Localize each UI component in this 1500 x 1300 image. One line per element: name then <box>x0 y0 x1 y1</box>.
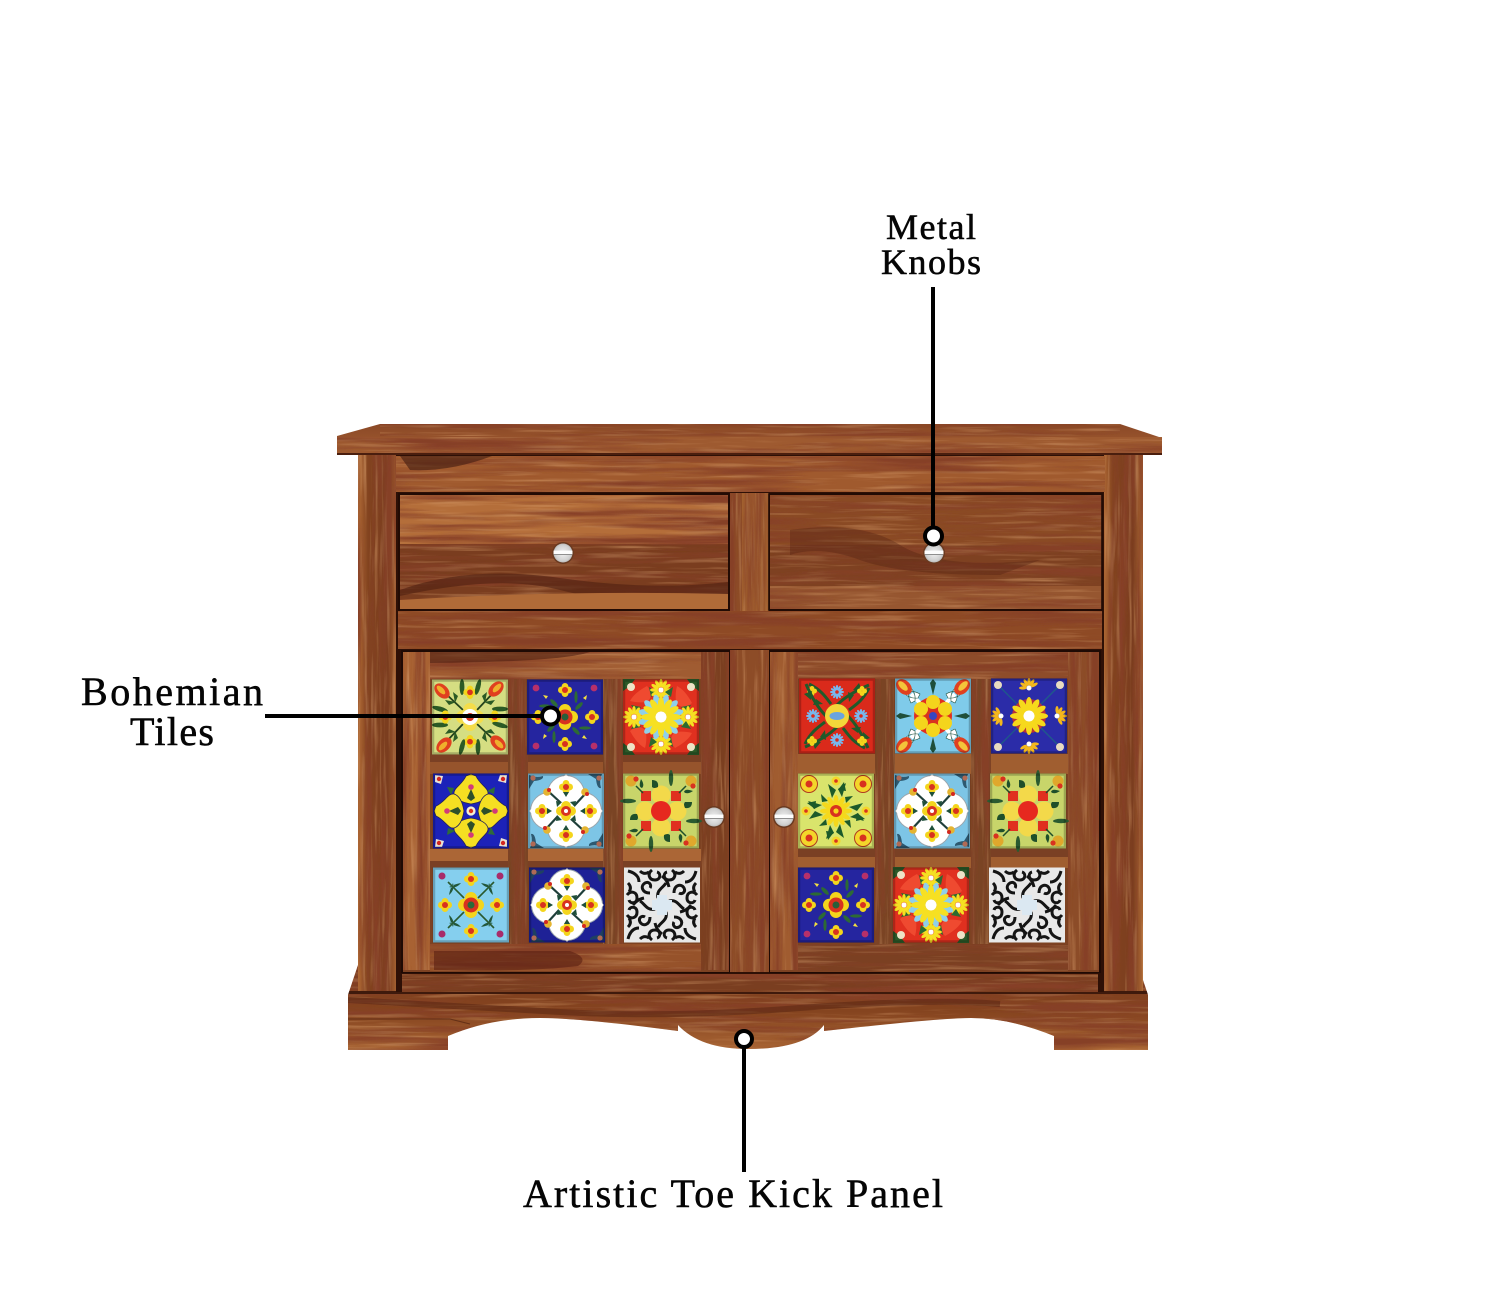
tile 8 <box>893 867 969 943</box>
callout: bohemian tiles <box>81 669 559 754</box>
tile 4 <box>798 774 874 848</box>
drawer: left <box>399 494 729 610</box>
tile 3 <box>991 678 1067 754</box>
plinth base <box>348 965 1148 1050</box>
tile 7 <box>798 868 874 942</box>
cabinet front backing <box>396 455 1104 992</box>
tile 8 <box>529 868 605 942</box>
tiles: right door <box>798 676 1069 943</box>
marker dot <box>542 708 559 724</box>
label: artistic toe kick panel: Artistic Toe Kick Panel <box>523 1171 943 1216</box>
door: right <box>769 650 1101 973</box>
tile 1 <box>431 678 509 756</box>
leader line <box>742 1047 746 1172</box>
leader line <box>931 287 935 530</box>
marker dot <box>925 528 942 544</box>
tile 6 <box>620 770 702 852</box>
table top <box>337 424 1162 455</box>
door: left <box>401 650 730 973</box>
callout: metal knobs <box>881 207 981 544</box>
tile 6 <box>987 770 1069 852</box>
tile 4 <box>433 774 509 848</box>
drawer: right <box>769 494 1102 610</box>
marker dot <box>736 1031 752 1047</box>
tile 2 <box>527 680 603 754</box>
knob: right door <box>773 806 795 828</box>
tile 1 <box>799 678 875 754</box>
knob: right drawer <box>923 542 945 564</box>
sideboard cabinet <box>337 424 1162 1050</box>
tile 9 <box>989 868 1065 942</box>
tile 7 <box>433 868 509 942</box>
right leg <box>1103 455 1143 991</box>
label: metal knobs: Metal <box>886 207 976 247</box>
label: bohemian tiles: Tiles <box>130 709 214 754</box>
label: bohemian tiles: Bohemian <box>81 669 263 714</box>
tile 3 <box>623 679 699 755</box>
tiles: left door <box>431 678 702 942</box>
knob: left drawer <box>552 542 574 564</box>
lower rail <box>402 974 1098 992</box>
tile 2 <box>893 676 973 756</box>
tile 5 <box>894 774 970 848</box>
upper apron <box>396 456 1105 492</box>
leader line <box>265 714 545 718</box>
callout: artistic toe kick panel <box>523 1031 943 1216</box>
centre stile <box>730 493 769 972</box>
label: metal knobs: Knobs <box>881 242 981 282</box>
tile 9 <box>624 868 700 942</box>
knob: left door <box>703 806 725 828</box>
left leg <box>358 455 398 991</box>
tile 5 <box>528 774 604 848</box>
middle rail <box>398 611 1102 649</box>
